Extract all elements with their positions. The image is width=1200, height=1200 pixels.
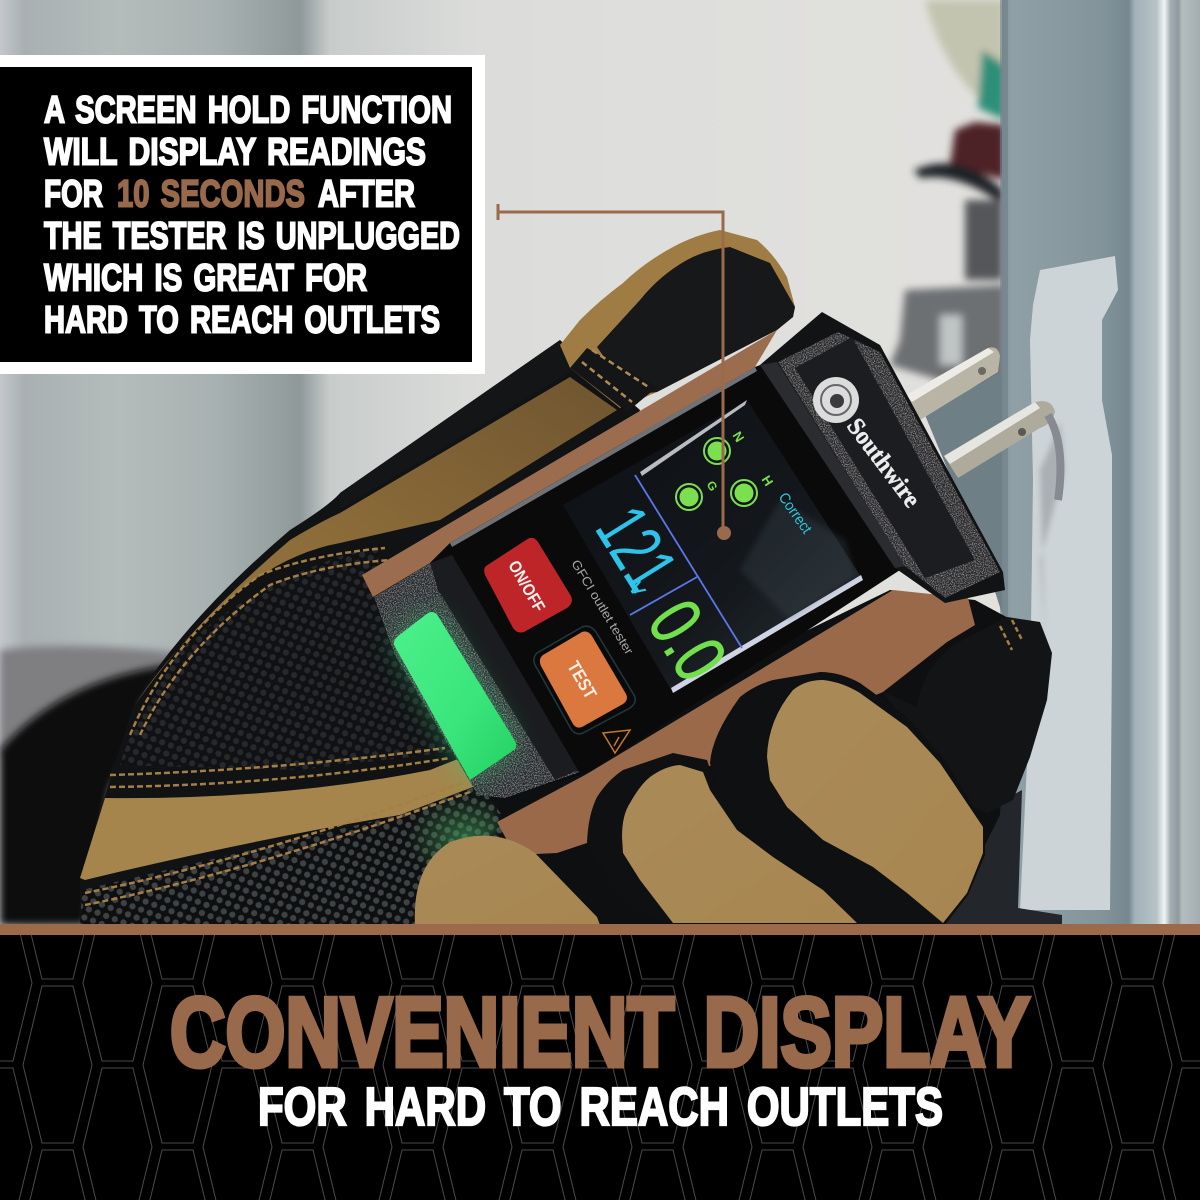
callout text: WILL DISPLAY READINGS [44,132,426,174]
device: plug cap with Southwire logo [760,312,1005,603]
leader line from callout to display [498,204,731,540]
glove: hand and palm [80,340,1012,925]
device: tan bottom body [497,590,975,855]
photo background: wall and blurred surroundings [0,0,1200,925]
glove: index finger [560,230,795,412]
device: black front face [374,362,900,792]
device: ON/OFF button [484,538,572,632]
device: LCD screen: v [623,574,655,601]
glove: dark underside behind device and fingers [415,590,1012,925]
screen: Correct label: Correct [775,490,815,538]
device: GFCI label: GFCI outlet tester [568,557,636,657]
callout text: THE TESTER IS UNPLUGGED [44,216,460,258]
finger: second finger [587,753,870,925]
screen: N, G, H indicators: N [730,429,747,445]
glove: tan back of hand [135,377,617,705]
finger: thumb [883,617,1052,813]
device: green status light [393,611,517,781]
bottom banner [0,924,1200,1200]
callout text: A SCREEN HOLD FUNCTION [44,90,452,132]
screen: voltage reading: 121 [580,492,693,604]
tester device [362,312,1005,855]
screen: current reading: 0.0 [632,586,743,694]
finger: first finger [415,836,600,925]
device: tan top strip [362,330,777,597]
device: ON/OFF button: ON/OFF [504,557,549,615]
device: textured end cap [374,563,580,798]
callout text: WHICH IS GREAT FOR [44,258,367,300]
callout text: 10 SECONDS [117,174,305,216]
glove: fingers over device [415,617,1052,925]
screen: N, G, H indicators: G [704,478,720,494]
plug prongs [906,347,1060,500]
glove: tan palm stripe [80,755,478,880]
callout box [0,55,485,374]
glove: lower grip palm [80,785,520,925]
glove: ribbed black trim [340,340,570,509]
device: TEST button [534,626,635,734]
finger: stitched cuff [570,348,657,412]
callout text: HARD TO REACH OUTLETS [44,300,440,342]
screen: divider lines [630,475,742,648]
glove: palm stitching [110,548,450,787]
finger: third finger [710,672,985,925]
device: LCD screen [563,400,863,694]
logo mark [813,377,859,423]
device: warning triangle [603,730,630,753]
glove: textured grip palm [120,545,470,770]
callout text [44,90,460,342]
callout text: AFTER [318,174,415,216]
screen: N, G, H indicators [676,429,776,510]
banner: subheading: FOR HARD TO REACH OUTLETS [258,1077,943,1137]
callout text: FOR [44,174,103,216]
device: plug cap with Southwire logo: Southwire [841,413,925,513]
banner: tan rule [0,924,1200,935]
metal stud with tape [945,0,1200,925]
device: TEST button: TEST [563,658,601,702]
screen: N, G, H indicators: H [759,473,776,489]
